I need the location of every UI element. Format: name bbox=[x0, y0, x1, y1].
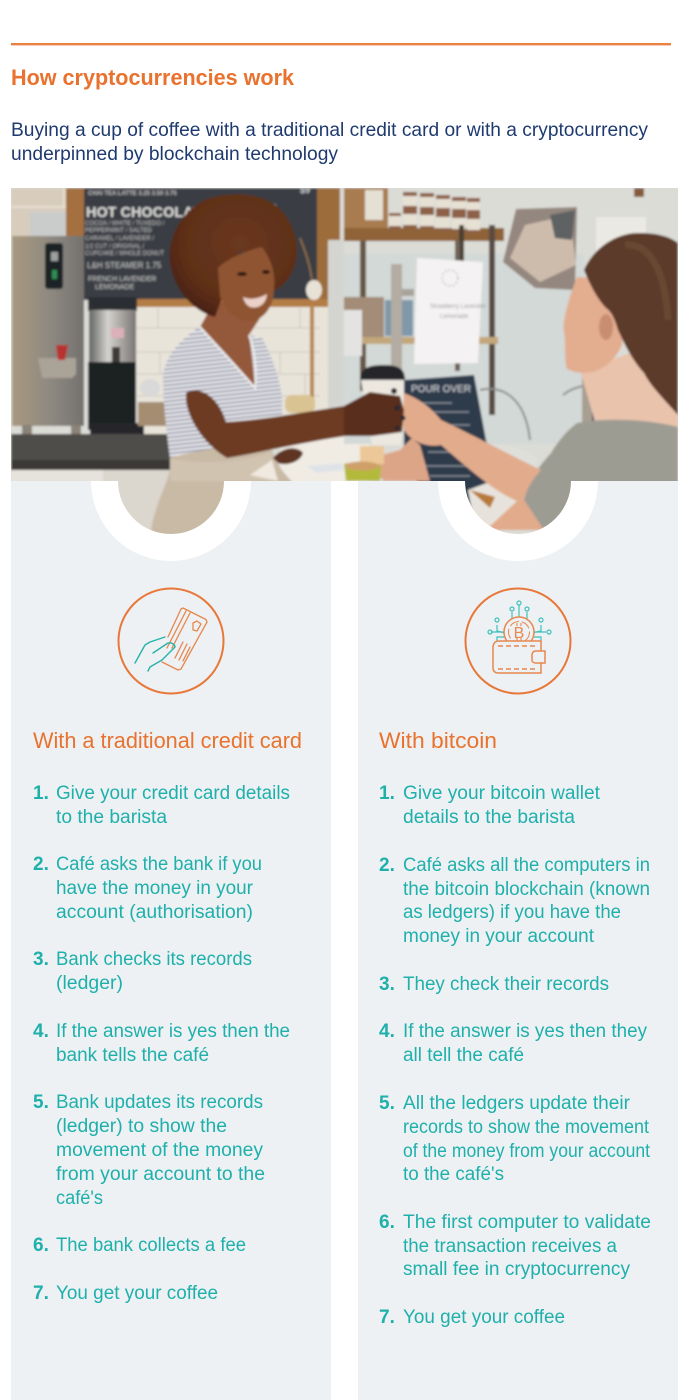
photo: barista handing coffee to customer bbox=[0, 180, 689, 545]
steps list: bitcoin: 3. bbox=[379, 974, 395, 995]
steps list: bitcoin bbox=[379, 783, 651, 1328]
photo: barista handing coffee to customer: PEPPERMINT / SALTED bbox=[85, 228, 152, 234]
snack bag bbox=[468, 480, 518, 527]
icon: bitcoin wallet bbox=[466, 588, 570, 694]
steps list: credit card: You get your coffee bbox=[56, 1283, 218, 1304]
steps list: bitcoin: the bitcoin blockchain (known bbox=[403, 879, 650, 900]
steps list: bitcoin: money in your account bbox=[403, 926, 595, 947]
heading: bitcoin: With bitcoin bbox=[379, 728, 497, 753]
customer arm bbox=[392, 390, 544, 530]
photo: barista handing coffee to customer: TACO SALAD bbox=[233, 204, 277, 211]
steps list: credit card: 3. bbox=[33, 949, 49, 970]
white ring: right bbox=[438, 401, 598, 561]
steps list: bitcoin: to the café's bbox=[403, 1164, 504, 1185]
panel content: bitcoin column bbox=[379, 588, 651, 1328]
steps list: bitcoin: All the ledgers update their bbox=[403, 1093, 631, 1114]
heading: credit card: With a traditional credit card bbox=[33, 728, 302, 753]
green cup and drink bbox=[360, 446, 384, 464]
title: How cryptocurrencies work bbox=[11, 65, 295, 90]
steps list: bitcoin: Café asks all the computers in bbox=[403, 855, 650, 876]
barista face bbox=[218, 247, 274, 321]
customer face bbox=[564, 277, 628, 373]
steps list: credit card: Bank updates its records bbox=[56, 1092, 263, 1113]
steps list: credit card bbox=[33, 783, 290, 1304]
photo: barista handing coffee to customer: L&H STEAMER 1.75 bbox=[87, 261, 162, 270]
steps list: bitcoin: They check their records bbox=[403, 974, 609, 995]
panel: credit card background bbox=[11, 481, 331, 1400]
steps list: credit card: Give your credit card details bbox=[56, 783, 290, 804]
customer shirt bbox=[524, 420, 678, 540]
subtitle bbox=[11, 119, 648, 165]
customer hair bbox=[584, 233, 678, 415]
panel: bitcoin background bbox=[358, 481, 678, 1400]
metal pole bbox=[391, 264, 402, 374]
steps list: credit card: account (authorisation) bbox=[56, 902, 253, 923]
steps list: credit card: bank tells the café bbox=[56, 1045, 209, 1066]
photo: barista handing coffee to customer: COCOA / WHITE / TUXEDO / bbox=[85, 221, 165, 227]
photo: barista handing coffee to customer: HOT CHOCOLATE bbox=[86, 204, 211, 221]
steps list: credit card: The bank collects a fee bbox=[56, 1235, 246, 1256]
steps list: credit card: café's bbox=[56, 1188, 103, 1209]
steps list: bitcoin: Give your bitcoin wallet bbox=[403, 783, 601, 804]
coffee urn bbox=[88, 297, 137, 311]
photo: barista handing coffee to customer: LEMONADE bbox=[95, 284, 135, 291]
plates and chair bbox=[486, 445, 537, 470]
photo: barista handing coffee to customer: POUR OVER bbox=[411, 384, 471, 395]
steps list: bitcoin: as ledgers) if you have the bbox=[403, 902, 621, 923]
steps list: bitcoin: records to show the movement bbox=[403, 1117, 650, 1138]
icon: bitcoin wallet: B bbox=[514, 625, 524, 642]
photo: barista handing coffee to customer: $9 bbox=[300, 185, 310, 195]
steps list: credit card: to the barista bbox=[56, 807, 167, 828]
menu board bbox=[402, 374, 488, 508]
photo: barista handing coffee to customer: Lemonade bbox=[440, 314, 469, 320]
barista neck and chest bbox=[200, 300, 262, 388]
counter and cabinet bbox=[11, 432, 172, 462]
panel content: credit card column bbox=[33, 588, 302, 1304]
icon: hand holding credit card bbox=[118, 588, 224, 694]
steps list: bitcoin: 7. bbox=[379, 1307, 395, 1328]
wall art bbox=[503, 207, 577, 290]
steps list: credit card: Bank checks its records bbox=[56, 949, 252, 970]
steps list: credit card: Café asks the bank if you bbox=[56, 854, 262, 875]
photo: barista handing coffee to customer: CARAMEL / LAVENDER / bbox=[85, 236, 154, 242]
steps list: credit card: movement of the money bbox=[56, 1140, 264, 1161]
orange header rule bbox=[11, 43, 671, 45]
photo: barista handing coffee to customer: CHAI TEA LATTE 3.25 3.50 3.75 bbox=[88, 191, 177, 197]
steps list: credit card: (ledger) to show the bbox=[56, 1116, 227, 1137]
photo: barista handing coffee to customer: FRENCH LAVENDER bbox=[88, 276, 156, 283]
steps list: bitcoin: 1. bbox=[379, 783, 395, 804]
subtitle: underpinned by blockchain technology bbox=[11, 143, 338, 165]
steps list: bitcoin: The first computer to validate bbox=[403, 1212, 651, 1233]
barista hair bbox=[170, 194, 297, 317]
photo: barista handing coffee to customer: Strawberry Lavender bbox=[430, 304, 486, 310]
shelf with jars bbox=[344, 188, 388, 228]
steps list: credit card: 4. bbox=[33, 1021, 49, 1042]
steps list: bitcoin: the transaction receives a bbox=[403, 1236, 617, 1257]
barista apron bbox=[150, 448, 292, 534]
steps list: credit card: (ledger) bbox=[56, 973, 123, 994]
white ring: left bbox=[91, 401, 251, 561]
steps list: bitcoin: 4. bbox=[379, 1021, 395, 1042]
steps list: bitcoin: You get your coffee bbox=[403, 1307, 565, 1328]
steps list: bitcoin: details to the barista bbox=[403, 807, 575, 828]
barista arm bbox=[184, 389, 346, 460]
steps list: credit card: 6. bbox=[33, 1235, 49, 1256]
steps list: credit card: If the answer is yes then the bbox=[56, 1021, 290, 1042]
tile wall bbox=[137, 305, 337, 435]
water boiler bbox=[12, 236, 84, 426]
steps list: bitcoin: 5. bbox=[379, 1093, 395, 1114]
paper sign bbox=[414, 258, 483, 364]
steps list: bitcoin: 6. bbox=[379, 1212, 395, 1233]
steps list: credit card: 2. bbox=[33, 854, 49, 875]
customer lower hand bbox=[377, 438, 432, 481]
steps list: credit card: 1. bbox=[33, 783, 49, 804]
coffee cup bbox=[361, 380, 404, 445]
steps list: bitcoin: small fee in cryptocurrency bbox=[403, 1259, 631, 1280]
steps list: credit card: 7. bbox=[33, 1283, 49, 1304]
steps list: credit card: have the money in your bbox=[56, 878, 254, 899]
photo: barista handing coffee to customer: 1/2 CUT / ORIGINAL / bbox=[85, 244, 144, 250]
steps list: credit card: from your account to the bbox=[56, 1164, 265, 1185]
steps list: bitcoin: all tell the café bbox=[403, 1045, 524, 1066]
barista shirt bbox=[163, 327, 282, 458]
customer neck and shoulders bbox=[580, 350, 678, 430]
steps list: bitcoin: If the answer is yes then they bbox=[403, 1021, 647, 1042]
steps list: bitcoin: 2. bbox=[379, 855, 395, 876]
steps list: credit card: 5. bbox=[33, 1092, 49, 1113]
bowls and box bbox=[138, 402, 166, 426]
left wall and tile bbox=[11, 188, 67, 238]
photo: barista handing coffee to customer: CUPCAKE / WHOLE DONUT bbox=[85, 251, 164, 257]
steps list: bitcoin: of the money from your account bbox=[403, 1141, 651, 1162]
right side of counter bbox=[280, 436, 370, 481]
glass screen and shelves bbox=[344, 254, 584, 444]
barista hand on cup bbox=[344, 392, 404, 436]
subtitle: Buying a cup of coffee with a traditional credit card or with a cryptocurrency bbox=[11, 119, 648, 141]
